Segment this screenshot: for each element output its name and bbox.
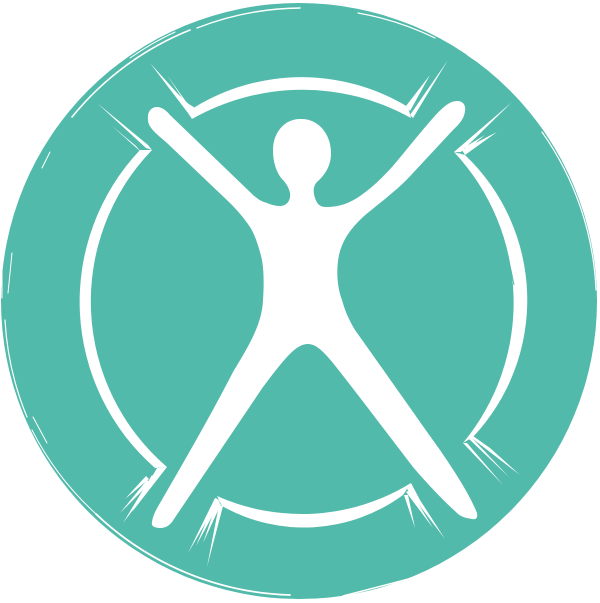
human figure with raised arms and spread legs [148, 101, 477, 528]
ring segment: top [150, 60, 448, 119]
ring segment: bottom [188, 483, 445, 567]
ring segment: left [80, 103, 167, 523]
ring segment: right [454, 102, 527, 485]
